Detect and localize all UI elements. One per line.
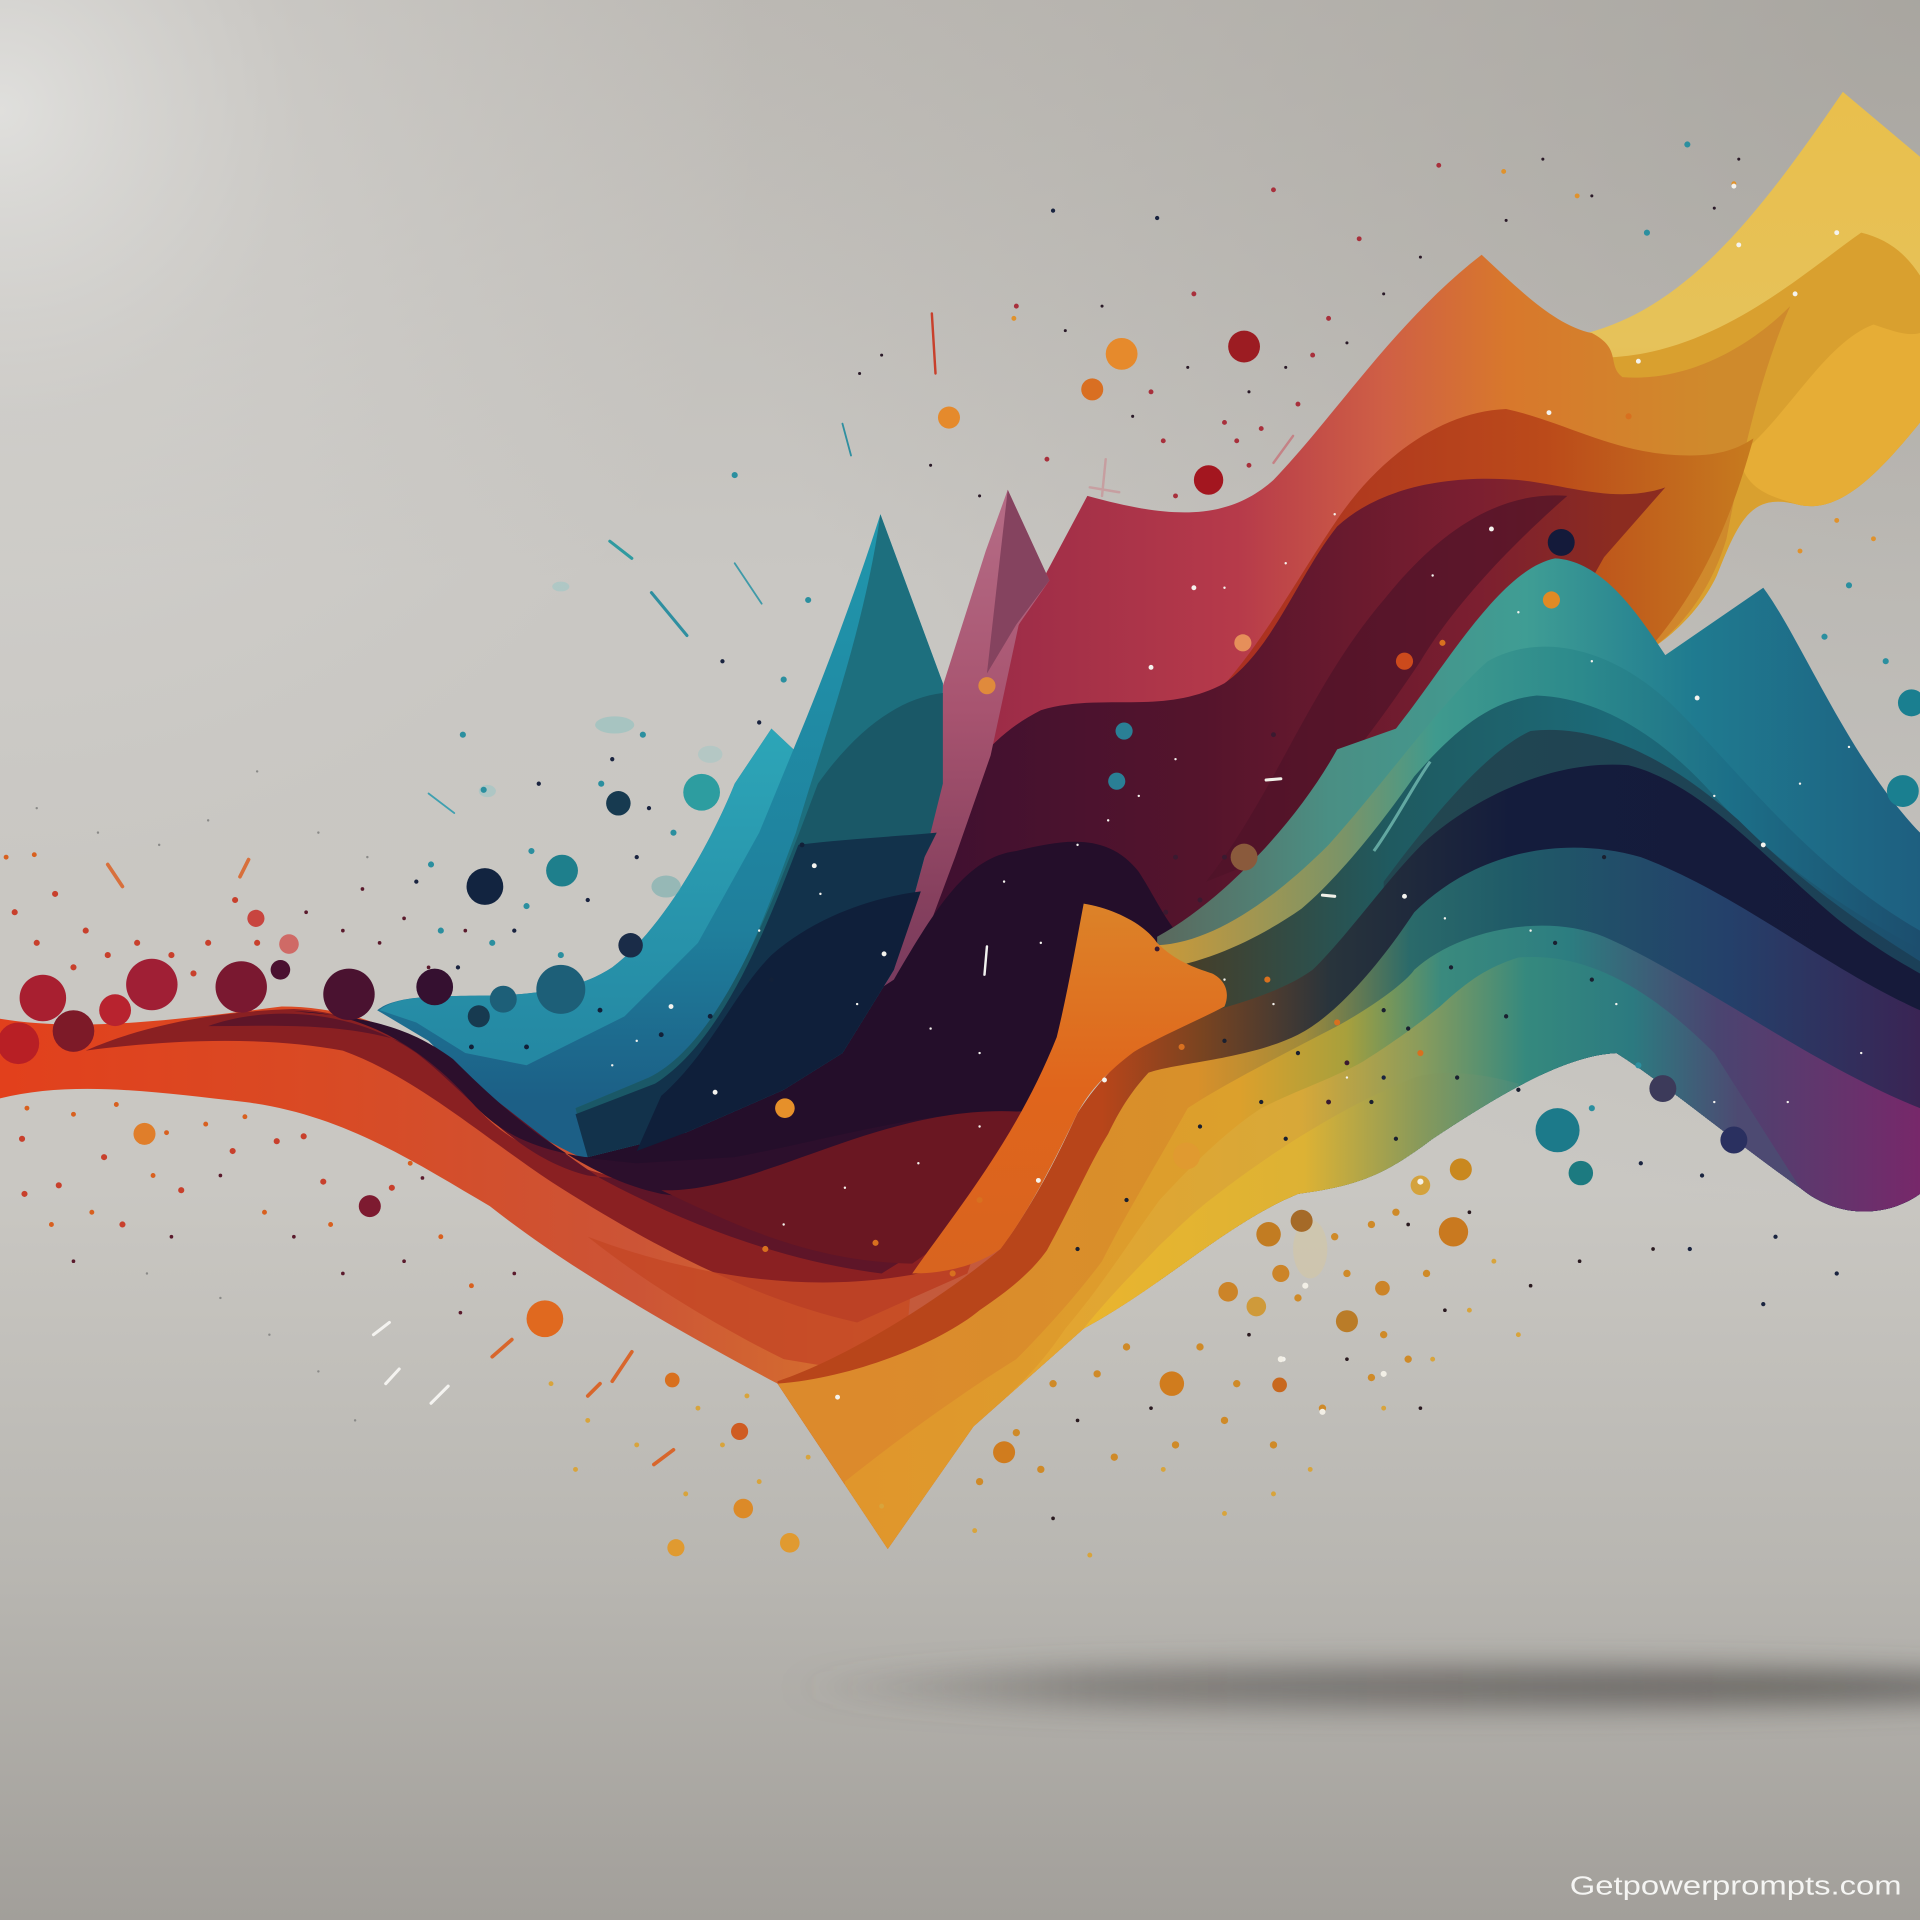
fine spatter: red and orange left — [6, 771, 514, 1420]
teal spike and navy folds — [377, 514, 943, 1157]
orange fold — [912, 904, 1227, 1273]
dark maroon diagonal band — [1206, 495, 1567, 882]
fine spatter: teal and navy — [416, 144, 1886, 1304]
fine spatter: white specks on waves — [612, 186, 1861, 1412]
watermark: Getpowerprompts.com — [1570, 1872, 1902, 1900]
soft splashes — [479, 582, 1327, 1278]
teal highlight stroke — [1374, 762, 1430, 851]
maroon layer — [857, 479, 1665, 1102]
left ribbon — [0, 1007, 1041, 1549]
dark plum core — [576, 842, 1194, 1180]
fine spatter: dark specks on waves — [765, 416, 1629, 1273]
large paint dots — [0, 331, 1920, 1556]
yellow ribbon — [1580, 92, 1920, 651]
fine spatter: gold below wave — [551, 1182, 1653, 1555]
streak marks — [108, 313, 1335, 1464]
right wave layers — [778, 558, 1920, 1592]
crimson to orange sheet — [943, 255, 1790, 980]
fine spatter: crimson top — [860, 159, 1873, 551]
red-orange band — [1206, 409, 1753, 882]
floor shadow — [784, 1667, 1920, 1708]
pink spike — [784, 490, 1049, 1102]
